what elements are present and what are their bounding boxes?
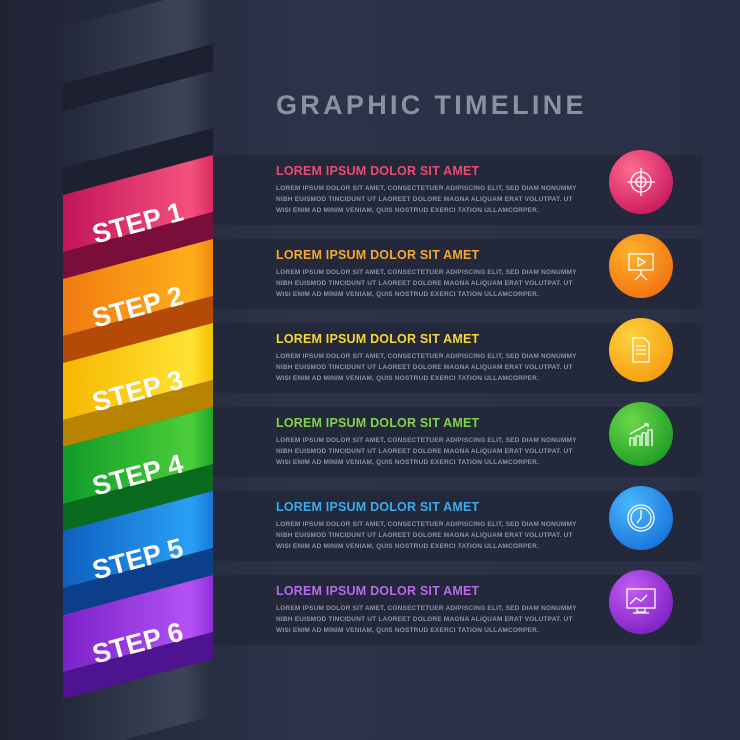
text block 1	[276, 164, 577, 214]
gray bottom piece	[63, 659, 213, 740]
text: LOREM IPSUM DOLOR SIT AMET, CONSECTETUER ADIPISCING ELIT, SED DIAM NONUMMY NIBH EUISMOD TINCIDUNT UT LAOREET DOLORE MAGNA ALIQUAM ERAT VOLUTPAT. UT WISI ENIM AD MINIM VENIAM, QUIS NOSTRUD EXERCI TATION ULLAMCORPER.	[276, 269, 577, 298]
icon: clock	[609, 486, 673, 550]
step 1	[63, 155, 213, 279]
step 6	[63, 575, 213, 699]
step 5	[63, 491, 213, 615]
text block 2	[276, 248, 577, 298]
icon: presentation	[609, 234, 673, 298]
step 6: STEP 6	[89, 617, 186, 670]
text: LOREM IPSUM DOLOR SIT AMET, CONSECTETUER ADIPISCING ELIT, SED DIAM NONUMMY NIBH EUISMOD TINCIDUNT UT LAOREET DOLORE MAGNA ALIQUAM ERAT VOLUTPAT. UT WISI ENIM AD MINIM VENIAM, QUIS NOSTRUD EXERCI TATION ULLAMCORPER.	[276, 437, 577, 466]
text: LOREM IPSUM DOLOR SIT AMET	[276, 164, 479, 178]
icon circles	[609, 150, 673, 634]
icon: chart	[609, 402, 673, 466]
step 3: STEP 3	[89, 365, 186, 418]
text: LOREM IPSUM DOLOR SIT AMET	[276, 416, 479, 430]
text: LOREM IPSUM DOLOR SIT AMET	[276, 584, 479, 598]
step 2	[63, 239, 213, 363]
step 5: STEP 5	[89, 533, 186, 586]
text block 5	[276, 500, 577, 550]
text block 4	[276, 416, 577, 466]
step 4	[63, 407, 213, 531]
title: GRAPHIC TIMELINE	[276, 90, 587, 120]
text: LOREM IPSUM DOLOR SIT AMET, CONSECTETUER ADIPISCING ELIT, SED DIAM NONUMMY NIBH EUISMOD TINCIDUNT UT LAOREET DOLORE MAGNA ALIQUAM ERAT VOLUTPAT. UT WISI ENIM AD MINIM VENIAM, QUIS NOSTRUD EXERCI TATION ULLAMCORPER.	[276, 185, 577, 214]
text block 3	[276, 332, 577, 382]
text block 6	[276, 584, 577, 634]
gray top pieces	[63, 0, 213, 195]
text: LOREM IPSUM DOLOR SIT AMET, CONSECTETUER ADIPISCING ELIT, SED DIAM NONUMMY NIBH EUISMOD TINCIDUNT UT LAOREET DOLORE MAGNA ALIQUAM ERAT VOLUTPAT. UT WISI ENIM AD MINIM VENIAM, QUIS NOSTRUD EXERCI TATION ULLAMCORPER.	[276, 605, 577, 634]
icon: target	[609, 150, 673, 214]
icon: document	[609, 318, 673, 382]
step 3	[63, 323, 213, 447]
step 1: STEP 1	[89, 197, 186, 250]
text: LOREM IPSUM DOLOR SIT AMET	[276, 500, 479, 514]
icon: monitor	[609, 570, 673, 634]
text: LOREM IPSUM DOLOR SIT AMET	[276, 332, 479, 346]
text: LOREM IPSUM DOLOR SIT AMET, CONSECTETUER ADIPISCING ELIT, SED DIAM NONUMMY NIBH EUISMOD TINCIDUNT UT LAOREET DOLORE MAGNA ALIQUAM ERAT VOLUTPAT. UT WISI ENIM AD MINIM VENIAM, QUIS NOSTRUD EXERCI TATION ULLAMCORPER.	[276, 353, 577, 382]
step 2: STEP 2	[89, 281, 186, 334]
text: LOREM IPSUM DOLOR SIT AMET	[276, 248, 479, 262]
step 4: STEP 4	[89, 449, 186, 502]
text: LOREM IPSUM DOLOR SIT AMET, CONSECTETUER ADIPISCING ELIT, SED DIAM NONUMMY NIBH EUISMOD TINCIDUNT UT LAOREET DOLORE MAGNA ALIQUAM ERAT VOLUTPAT. UT WISI ENIM AD MINIM VENIAM, QUIS NOSTRUD EXERCI TATION ULLAMCORPER.	[276, 521, 577, 550]
